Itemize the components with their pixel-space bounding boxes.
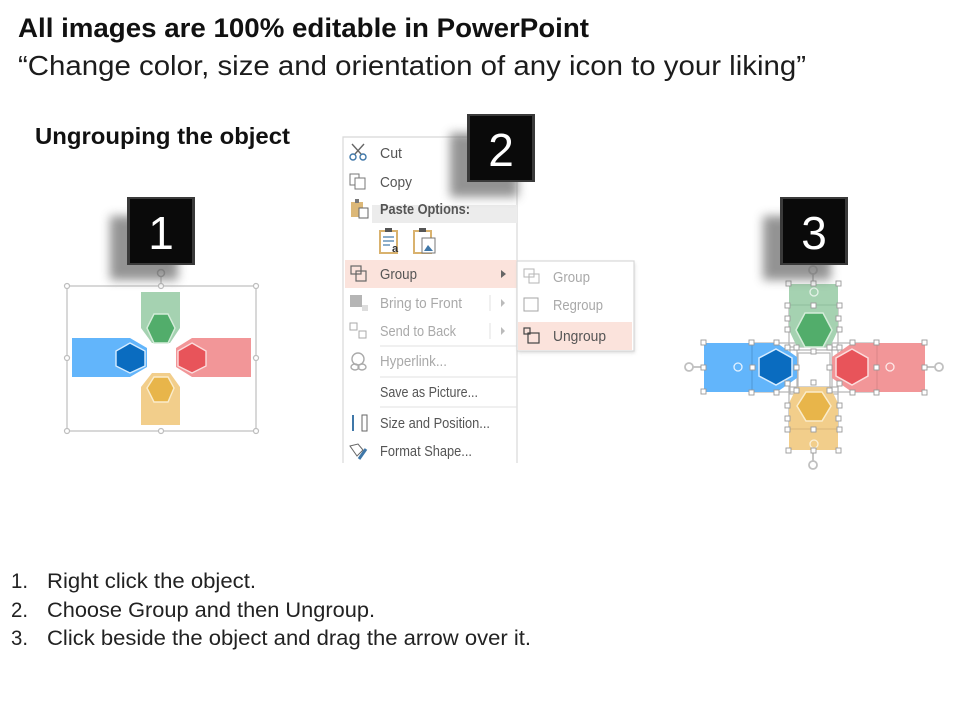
menu background — [343, 137, 517, 463]
panel: step 1 grouped object — [64, 270, 258, 434]
menu items: Cut — [380, 146, 402, 162]
instructions list — [11, 570, 531, 650]
menu items: Copy — [380, 175, 413, 191]
submenu: Ungroup — [553, 329, 606, 345]
rotation handles — [685, 266, 943, 469]
instructions list: 1. — [11, 570, 28, 593]
panel: step 3 ungrouped object — [685, 266, 943, 469]
menu items: Hyperlink... — [380, 354, 447, 370]
submenu — [517, 261, 635, 353]
icon: paste — [351, 199, 368, 218]
yellow arm — [141, 373, 180, 425]
menu items: Size and Position... — [380, 416, 490, 432]
icon: paste text — [380, 228, 399, 255]
ungroup highlight — [518, 322, 632, 350]
icon: paste picture — [414, 228, 435, 253]
instructions list: 2. — [11, 599, 28, 622]
group highlight — [345, 260, 517, 288]
resize handles — [701, 281, 927, 453]
green arm — [789, 284, 838, 347]
menu dividers and arrows — [380, 270, 517, 407]
icon: size and position — [353, 415, 367, 431]
blue arm — [704, 343, 797, 392]
instructions list: Click beside the object and drag the arrow over it. — [47, 627, 531, 650]
menu items: Paste Options: — [380, 202, 470, 218]
icon: copy — [350, 174, 365, 189]
menu items: Group — [380, 267, 417, 283]
green arm — [141, 292, 180, 343]
icon: send to back — [350, 323, 366, 338]
blue arm — [72, 338, 147, 377]
red arm — [832, 343, 925, 392]
badge 2: 2 — [488, 124, 514, 176]
submenu: Regroup — [553, 298, 603, 314]
panel: context menu — [343, 137, 635, 463]
menu items: Bring to Front — [380, 296, 462, 312]
inner selection lines — [752, 305, 877, 429]
icon: hyperlink — [351, 353, 366, 370]
instructions list: Right click the object. — [47, 570, 256, 593]
menu items — [380, 146, 490, 460]
yellow arm — [789, 387, 838, 450]
icon: format shape — [350, 444, 366, 459]
title: All images are 100% editable in PowerPoint — [18, 13, 589, 43]
red arm — [176, 338, 251, 377]
badge 3: 3 — [801, 207, 827, 259]
badge 2 — [450, 114, 535, 197]
icon: scissors — [350, 144, 366, 160]
heading: ungrouping the object: Ungrouping the object — [35, 123, 290, 149]
submenu: Group — [553, 270, 590, 286]
icon: group — [351, 266, 366, 281]
subtitle: “Change color, size and orientation of any icon to your liking” — [18, 50, 806, 81]
menu items: Format Shape... — [380, 444, 472, 460]
icon: bring to front — [350, 295, 368, 311]
icon: paste text: a — [392, 243, 399, 255]
badge 1: 1 — [148, 207, 174, 259]
badge 3 — [763, 197, 848, 280]
paste options band — [372, 205, 517, 223]
selection box — [64, 270, 258, 434]
instructions list: Choose Group and then Ungroup. — [47, 599, 375, 622]
menu items: Save as Picture... — [380, 385, 478, 401]
badge 1 — [110, 197, 195, 280]
instructions list: 3. — [11, 627, 28, 650]
menu items: Send to Back — [380, 324, 457, 340]
